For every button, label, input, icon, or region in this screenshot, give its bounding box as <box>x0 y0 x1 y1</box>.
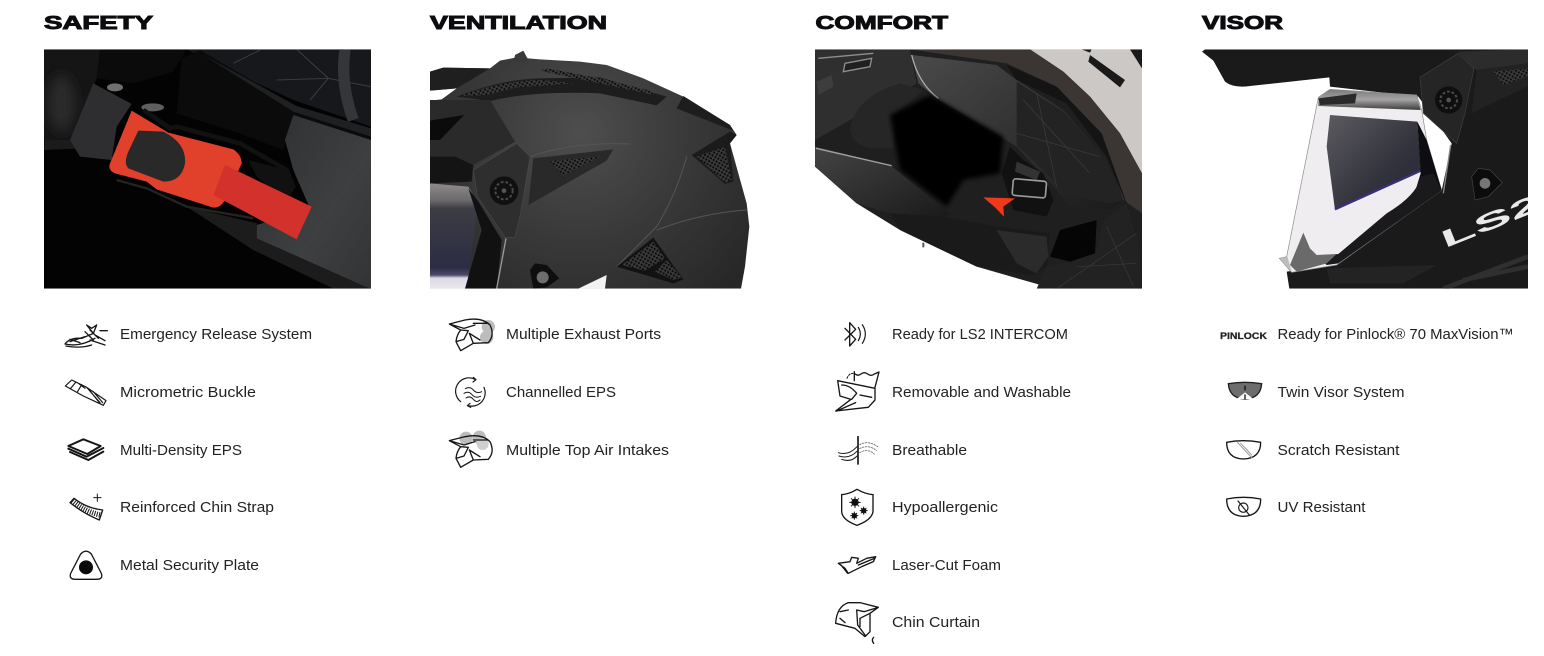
photo: helmet rear with vents <box>430 51 749 289</box>
icon: removable and washable liner <box>836 372 879 411</box>
icon: emergency release system <box>65 325 107 347</box>
icon: twin visor system <box>1228 382 1262 400</box>
label: ready for pinlock: Ready for Pinlock® 70 MaxVision™ <box>1278 326 1514 343</box>
heading: safety: SAFETY <box>44 12 154 33</box>
photo: red emergency release buckle <box>44 49 371 289</box>
label: breathable: Breathable <box>892 442 967 459</box>
label: multiple top air intakes: Multiple Top Air Intakes <box>506 442 669 459</box>
icon: multiple exhaust ports <box>449 319 495 351</box>
photo: helmet side with clear visor <box>1202 49 1544 289</box>
icon: breathable <box>838 437 878 464</box>
icon: UV resistant <box>1227 497 1261 516</box>
label: micrometric buckle: Micrometric Buckle <box>120 384 256 401</box>
panel: safety <box>44 12 371 579</box>
icon: channelled EPS <box>456 377 485 407</box>
icon: metal security plate <box>70 551 102 579</box>
label: ready for LS2 intercom: Ready for LS2 INTERCOM <box>892 326 1068 343</box>
icon: laser-cut foam <box>838 557 876 573</box>
icon: micrometric buckle <box>65 380 106 405</box>
label: metal security plate: Metal Security Plate <box>120 557 259 574</box>
heading: visor: VISOR <box>1202 12 1283 33</box>
panel: comfort <box>815 12 1142 643</box>
label: chin curtain: Chin Curtain <box>892 614 980 631</box>
icon: reinforced chin strap <box>70 494 103 520</box>
label: laser-cut foam: Laser-Cut Foam <box>892 557 1001 574</box>
label: reinforced chin strap: Reinforced Chin Strap <box>120 499 274 516</box>
panel: ventilation <box>430 12 749 467</box>
heading: comfort: COMFORT <box>816 12 949 33</box>
label: emergency release system: Emergency Release System <box>120 326 312 343</box>
icon: pinlock logo: PINLOCK <box>1220 331 1267 342</box>
label: scratch resistant: Scratch Resistant <box>1278 442 1400 459</box>
icon: scratch resistant <box>1227 441 1261 459</box>
label: multiple exhaust ports: Multiple Exhaust Ports <box>506 326 661 343</box>
label: multi-density EPS: Multi-Density EPS <box>120 442 242 459</box>
label: channelled EPS: Channelled EPS <box>506 384 616 401</box>
label: removable and washable: Removable and Washable <box>892 384 1071 401</box>
icon: multi-density EPS <box>68 439 103 460</box>
label: hypoallergenic: Hypoallergenic <box>892 499 999 516</box>
photo: helmet interior lining <box>815 49 1142 289</box>
label: UV resistant: UV Resistant <box>1278 499 1366 516</box>
icon: chin curtain <box>836 603 878 643</box>
icon: bluetooth intercom <box>845 323 865 346</box>
panel: visor <box>1202 12 1544 516</box>
photo: helmet side with clear visor: LS2 <box>1437 189 1544 253</box>
heading: ventilation: VENTILATION <box>430 12 607 33</box>
icon: hypoallergenic shield <box>842 489 873 525</box>
icon: multiple top air intakes <box>449 431 492 467</box>
label: twin visor system: Twin Visor System <box>1278 384 1404 401</box>
